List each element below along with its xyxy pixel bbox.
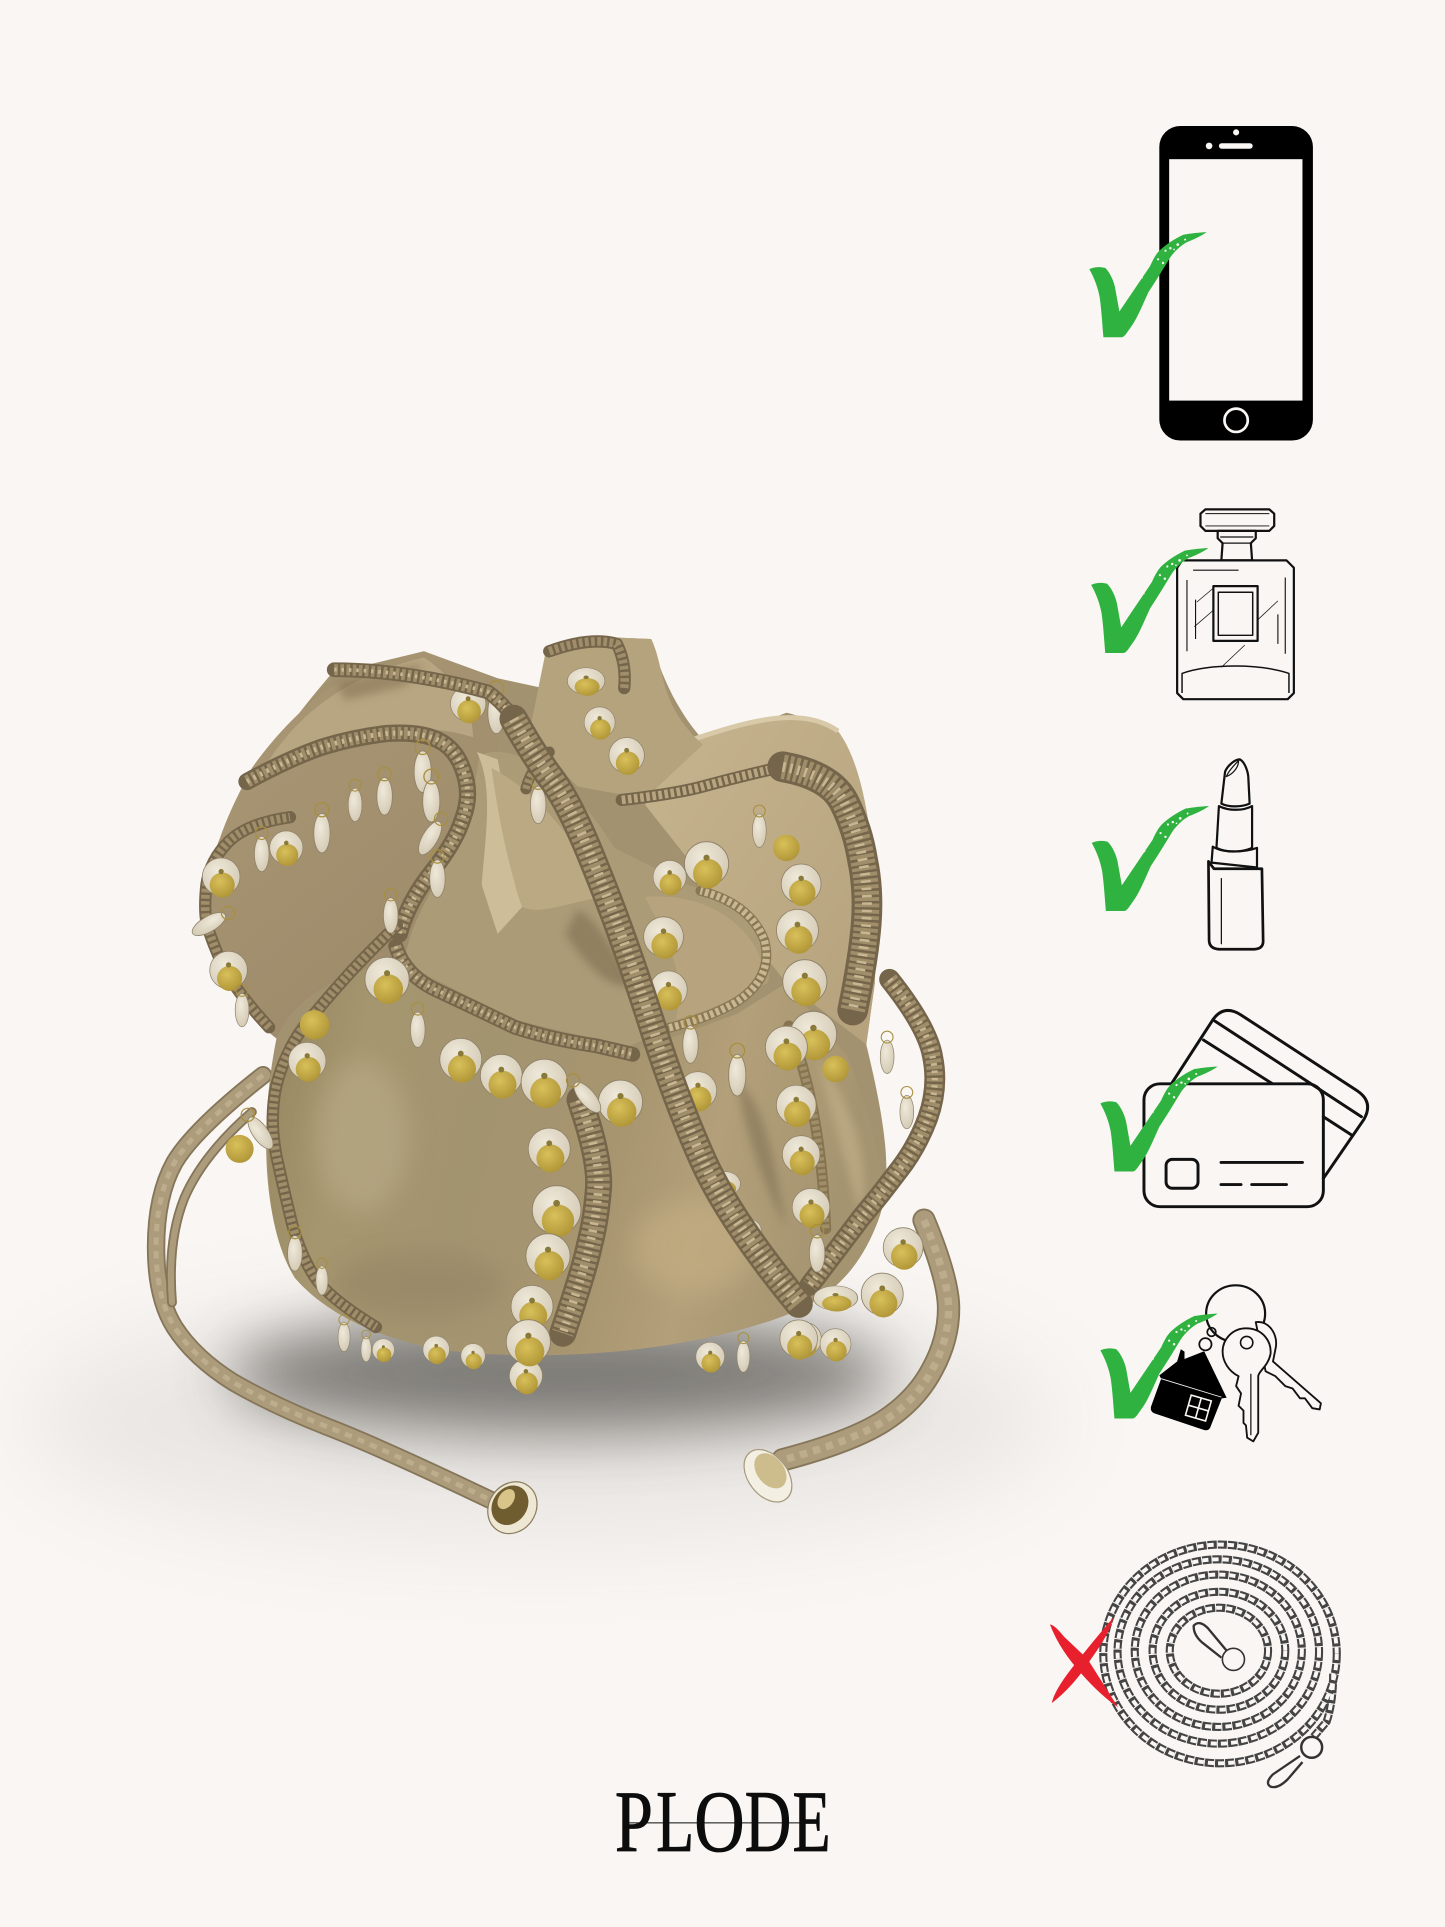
brand logo: O xyxy=(694,1773,745,1871)
drawstrings xyxy=(156,1075,949,1502)
red cross mark xyxy=(1050,1618,1118,1707)
top knot xyxy=(528,637,703,799)
front card xyxy=(1144,1084,1323,1207)
brand logo: P xyxy=(615,1773,653,1871)
gathered center folds xyxy=(405,752,770,1047)
brand logo: E xyxy=(793,1773,831,1871)
icon: metal chain xyxy=(1103,1545,1337,1787)
sequins under the bottom rim xyxy=(338,1315,851,1394)
shell and gold sequins xyxy=(189,740,923,1366)
green check marks xyxy=(1089,232,1218,1419)
back card xyxy=(1172,1010,1368,1178)
brand logo xyxy=(615,1773,831,1871)
brand logo: D xyxy=(745,1773,791,1871)
shell and gold sequins behind the strap xyxy=(450,668,787,1282)
house fob xyxy=(1151,1349,1227,1430)
left back lobe xyxy=(203,651,499,1038)
brand logo: L xyxy=(656,1773,694,1871)
icon: bank cards xyxy=(1144,1010,1368,1207)
icon: smartphone xyxy=(1159,126,1313,441)
front key xyxy=(1223,1328,1271,1441)
icon: house keychain and keys xyxy=(1151,1285,1321,1441)
string end buttons xyxy=(478,1440,802,1543)
main wide braided strap xyxy=(334,670,799,1304)
pouch base silhouette xyxy=(202,637,886,1355)
front pouch body xyxy=(268,964,882,1355)
icon: perfume bottle xyxy=(1177,509,1294,699)
ground shadow under pouch xyxy=(25,1296,1057,1542)
braided trims xyxy=(205,641,935,1333)
icon: lipstick xyxy=(1208,759,1263,949)
right back lobe xyxy=(645,718,876,1044)
clasps xyxy=(1194,1623,1322,1787)
pouch product photo illustration xyxy=(156,637,949,1543)
back key xyxy=(1256,1322,1321,1409)
